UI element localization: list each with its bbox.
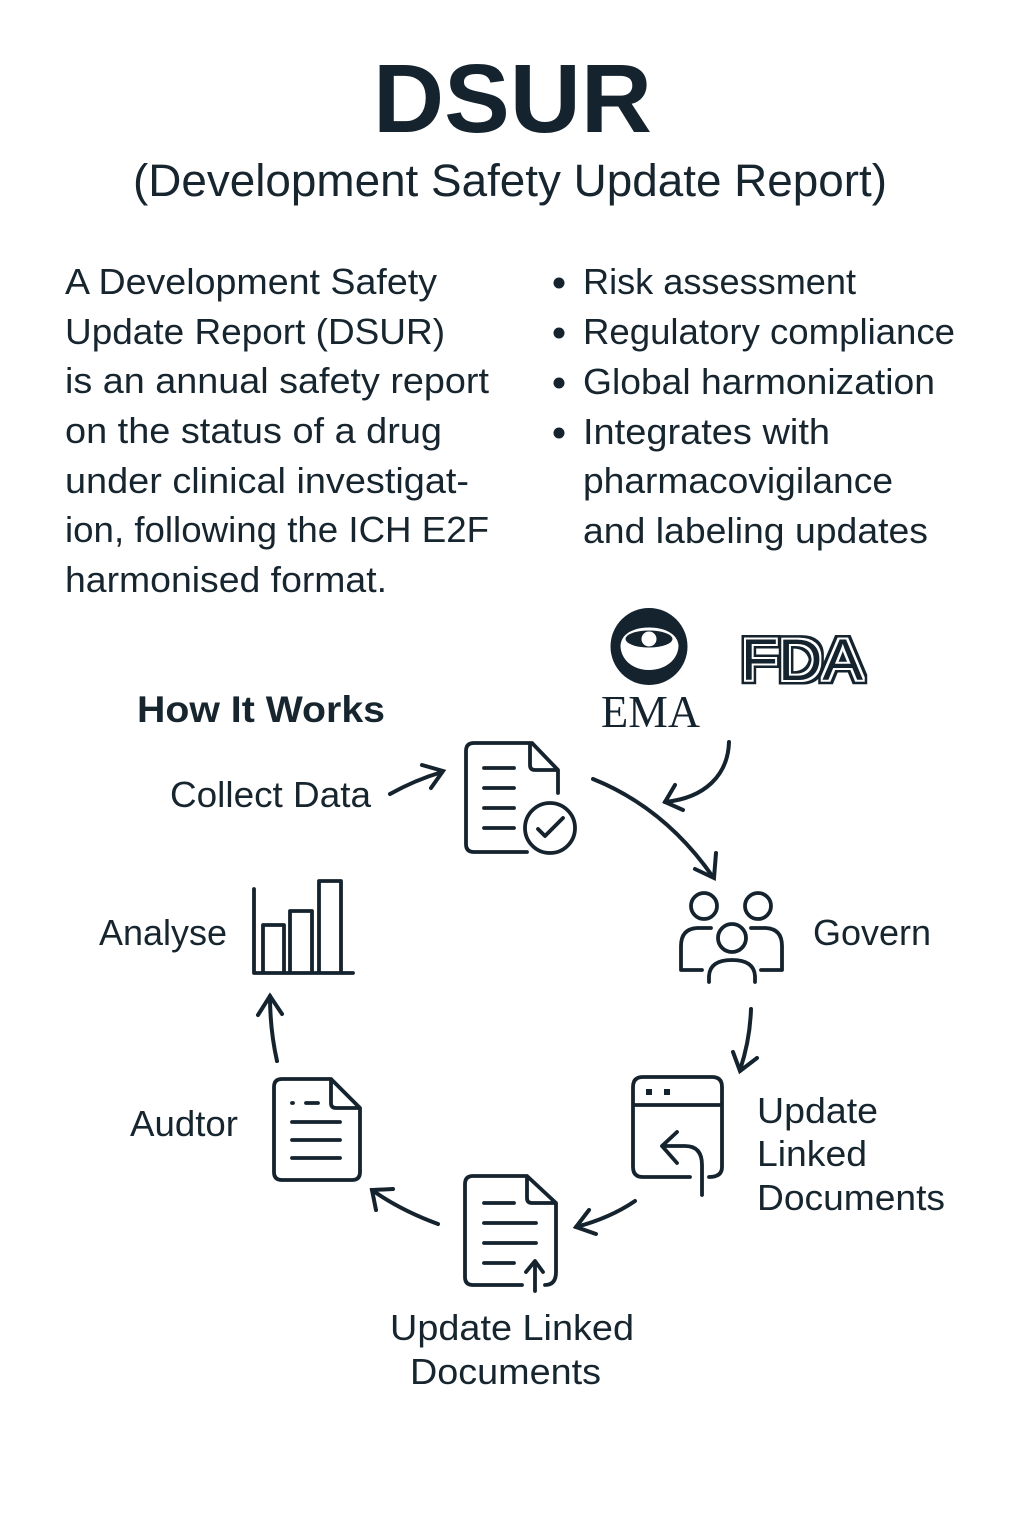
logo: EMA: EMA (601, 686, 700, 737)
logo: EMA (601, 608, 700, 737)
bullet list: key features: Risk assessment (583, 261, 856, 302)
text block: definition: on the status of a drug (65, 410, 442, 451)
step: collect data (170, 743, 575, 853)
step: update linked documents (window): Linked (757, 1133, 867, 1174)
bullet list: key features: Integrates with (583, 411, 830, 452)
step: update linked documents (window): Documents (757, 1177, 945, 1218)
text block: definition: is an annual safety report (65, 360, 489, 401)
title: DSUR (373, 44, 652, 153)
arrow: collect data to govern (593, 779, 716, 878)
logo: FDA: FDA (741, 628, 863, 693)
subtitle: (Development Safety Update Report) (133, 155, 887, 206)
bullet list: key features (554, 261, 955, 551)
arrow: window to document (576, 1201, 635, 1234)
step: update linked documents (document) (390, 1176, 634, 1392)
bullet list: key features: Global harmonization (583, 361, 935, 402)
step: update linked documents (window) (633, 1077, 945, 1218)
arrow: govern to update (733, 1009, 757, 1071)
step: govern (681, 893, 931, 982)
text block: definition (65, 261, 489, 600)
bullet list: key features: Regulatory compliance (583, 311, 955, 352)
step: collect data: Collect Data (170, 774, 372, 815)
arrow: audit to analyse (258, 996, 282, 1061)
text block: definition: Update Report (DSUR) (65, 311, 445, 352)
step: update linked documents (window): Update (757, 1090, 878, 1131)
step: analyse: Analyse (99, 912, 227, 953)
step: audtor (130, 1079, 360, 1180)
step: update linked documents (document): Documents (410, 1351, 601, 1392)
text block: definition: under clinical investigat- (65, 460, 469, 501)
text block: definition: A Development Safety (65, 261, 437, 302)
bullet list: key features: pharmacovigilance (583, 460, 893, 501)
arrow: document to audit (372, 1189, 438, 1224)
step: audtor: Audtor (130, 1103, 238, 1144)
step: analyse (99, 881, 353, 973)
text block: definition: ion, following the ICH E2F (65, 509, 489, 550)
heading: how it works: How It Works (137, 689, 385, 730)
step: govern: Govern (813, 912, 931, 953)
text block: definition: harmonised format. (65, 559, 387, 600)
step: update linked documents (document): Update Linked (390, 1307, 634, 1348)
arrow: into collect data (390, 765, 443, 794)
arrow: regulators to process (665, 742, 729, 810)
bullet list: key features: and labeling updates (583, 510, 928, 551)
